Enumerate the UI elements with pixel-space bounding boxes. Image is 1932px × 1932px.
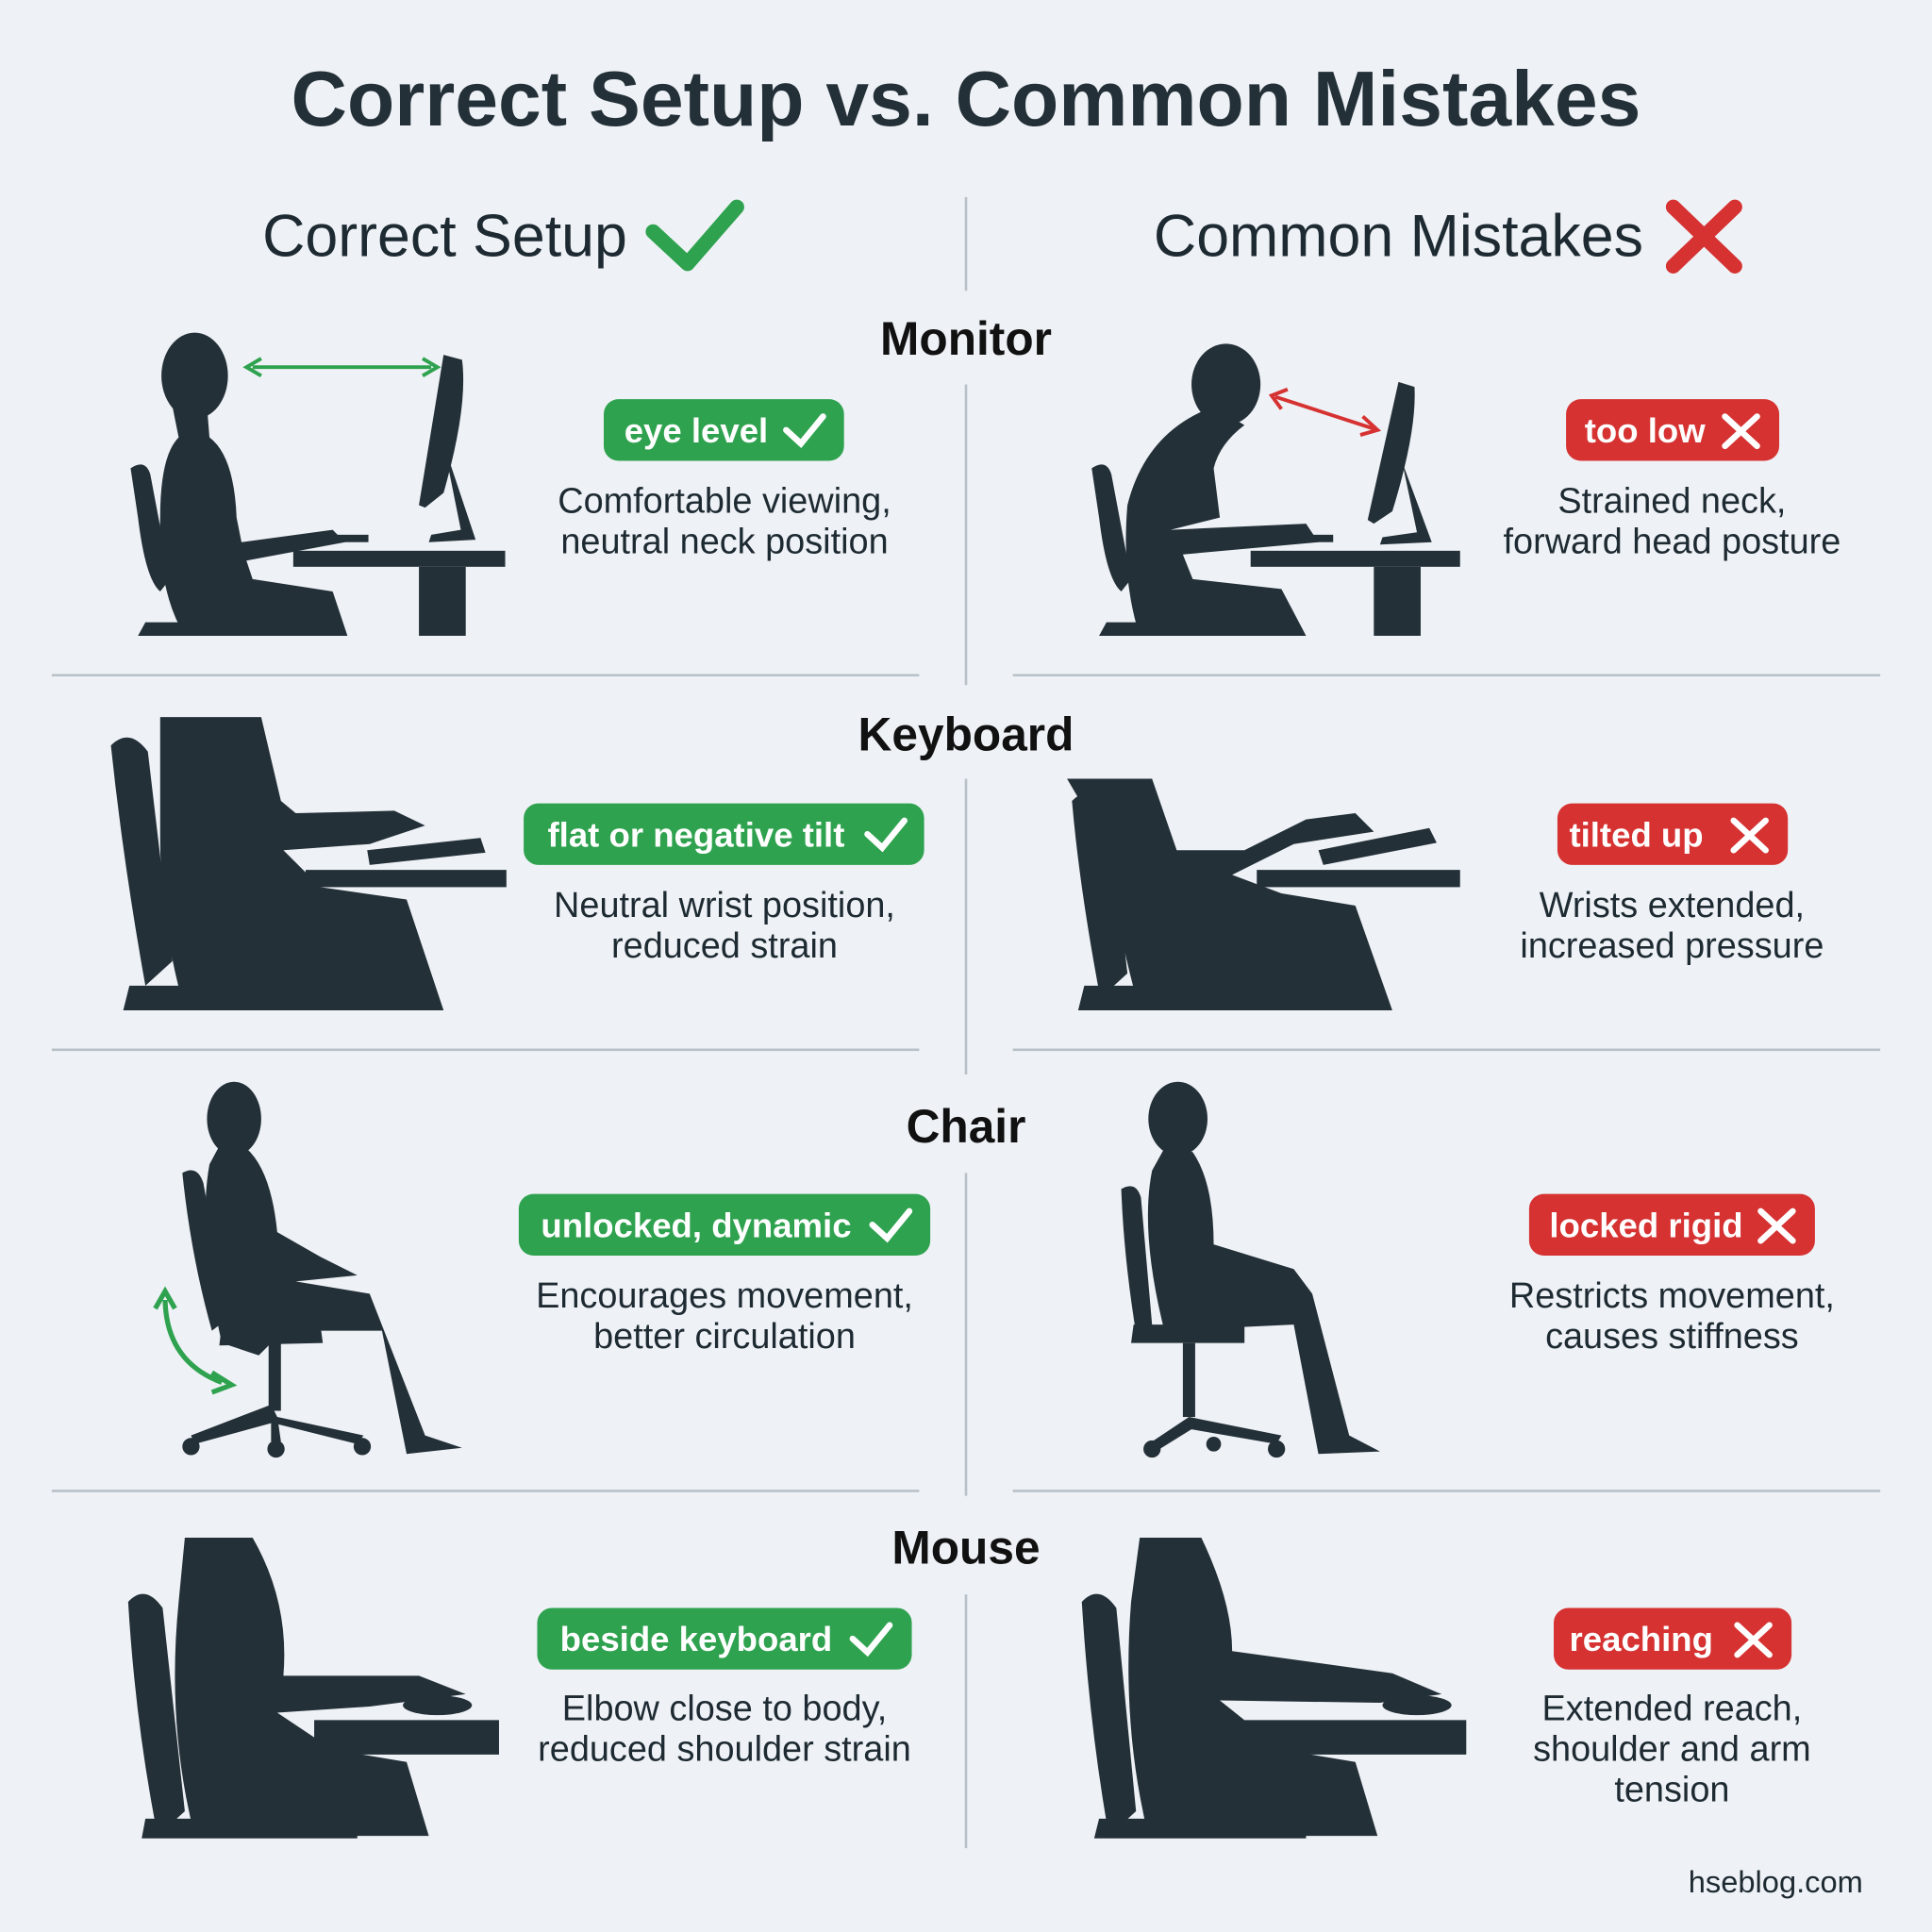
text: keyboard correct: reduced strain [611, 926, 838, 966]
text: keyboard correct: Neutral wrist position, [554, 886, 895, 925]
badge: unlocked, dynamic [519, 1194, 930, 1256]
figure: keyboard correct [111, 717, 507, 1010]
figure: mouse correct [128, 1538, 499, 1839]
text: chair correct: Encourages movement, [536, 1276, 913, 1316]
badge: beside keyboard: beside keyboard [560, 1620, 832, 1658]
figure: chair correct [182, 1082, 462, 1457]
text: monitor mistake: forward head posture [1504, 522, 1840, 561]
figure: mouse mistake [1082, 1538, 1466, 1839]
text: chair correct: better circulation [593, 1317, 856, 1357]
section label: chair: Chair [907, 1100, 1025, 1153]
badge: locked rigid [1529, 1194, 1815, 1256]
figure: monitor correct [130, 333, 506, 636]
badge: locked rigid: locked rigid [1549, 1206, 1743, 1244]
text: monitor correct: neutral neck position [560, 522, 889, 561]
badge: too low [1566, 399, 1779, 460]
text: keyboard mistake: Wrists extended, [1540, 886, 1805, 925]
badge: eye level [604, 399, 844, 460]
heading: common mistakes: Common Mistakes [1154, 204, 1643, 270]
text: mouse correct: Elbow close to body, [562, 1689, 887, 1728]
text: mouse correct: reduced shoulder strain [538, 1729, 911, 1769]
figure: chair mistake [1122, 1082, 1380, 1457]
text: mouse mistake: shoulder and arm [1533, 1729, 1811, 1769]
badge: too low: too low [1585, 411, 1706, 450]
badge: reaching [1554, 1607, 1791, 1670]
figure: keyboard mistake [1067, 778, 1460, 1010]
heading: correct setup: Correct Setup [262, 204, 627, 270]
text: chair mistake: Restricts movement, [1509, 1276, 1835, 1316]
badge: beside keyboard [537, 1607, 912, 1670]
badge: flat or negative tilt: flat or negative tilt [548, 815, 844, 854]
badge: tilted up [1557, 804, 1788, 865]
arrow: too low [1272, 390, 1377, 435]
section label: keyboard: Keyboard [858, 708, 1074, 760]
section label: mouse: Mouse [891, 1521, 1041, 1574]
title: Correct Setup vs. Common Mistakes [291, 57, 1641, 142]
footer: source: hseblog.com [1689, 1864, 1863, 1899]
badge: unlocked, dynamic: unlocked, dynamic [541, 1206, 852, 1244]
section label: monitor: Monitor [880, 312, 1052, 365]
figure: monitor mistake [1091, 343, 1460, 636]
text: chair mistake: causes stiffness [1545, 1317, 1799, 1357]
text: mouse mistake: Extended reach, [1542, 1689, 1802, 1728]
text: monitor correct: Comfortable viewing, [558, 481, 891, 521]
badge: reaching: reaching [1570, 1620, 1713, 1658]
badge: flat or negative tilt [524, 804, 924, 865]
arrow: eye distance [246, 358, 438, 375]
text: monitor mistake: Strained neck, [1557, 481, 1786, 521]
badge: eye level: eye level [625, 411, 768, 450]
text: mouse mistake: tension [1614, 1771, 1729, 1810]
text: keyboard mistake: increased pressure [1520, 926, 1824, 966]
arrow: recline motion [156, 1291, 232, 1392]
badge: tilted up: tilted up [1569, 815, 1704, 854]
